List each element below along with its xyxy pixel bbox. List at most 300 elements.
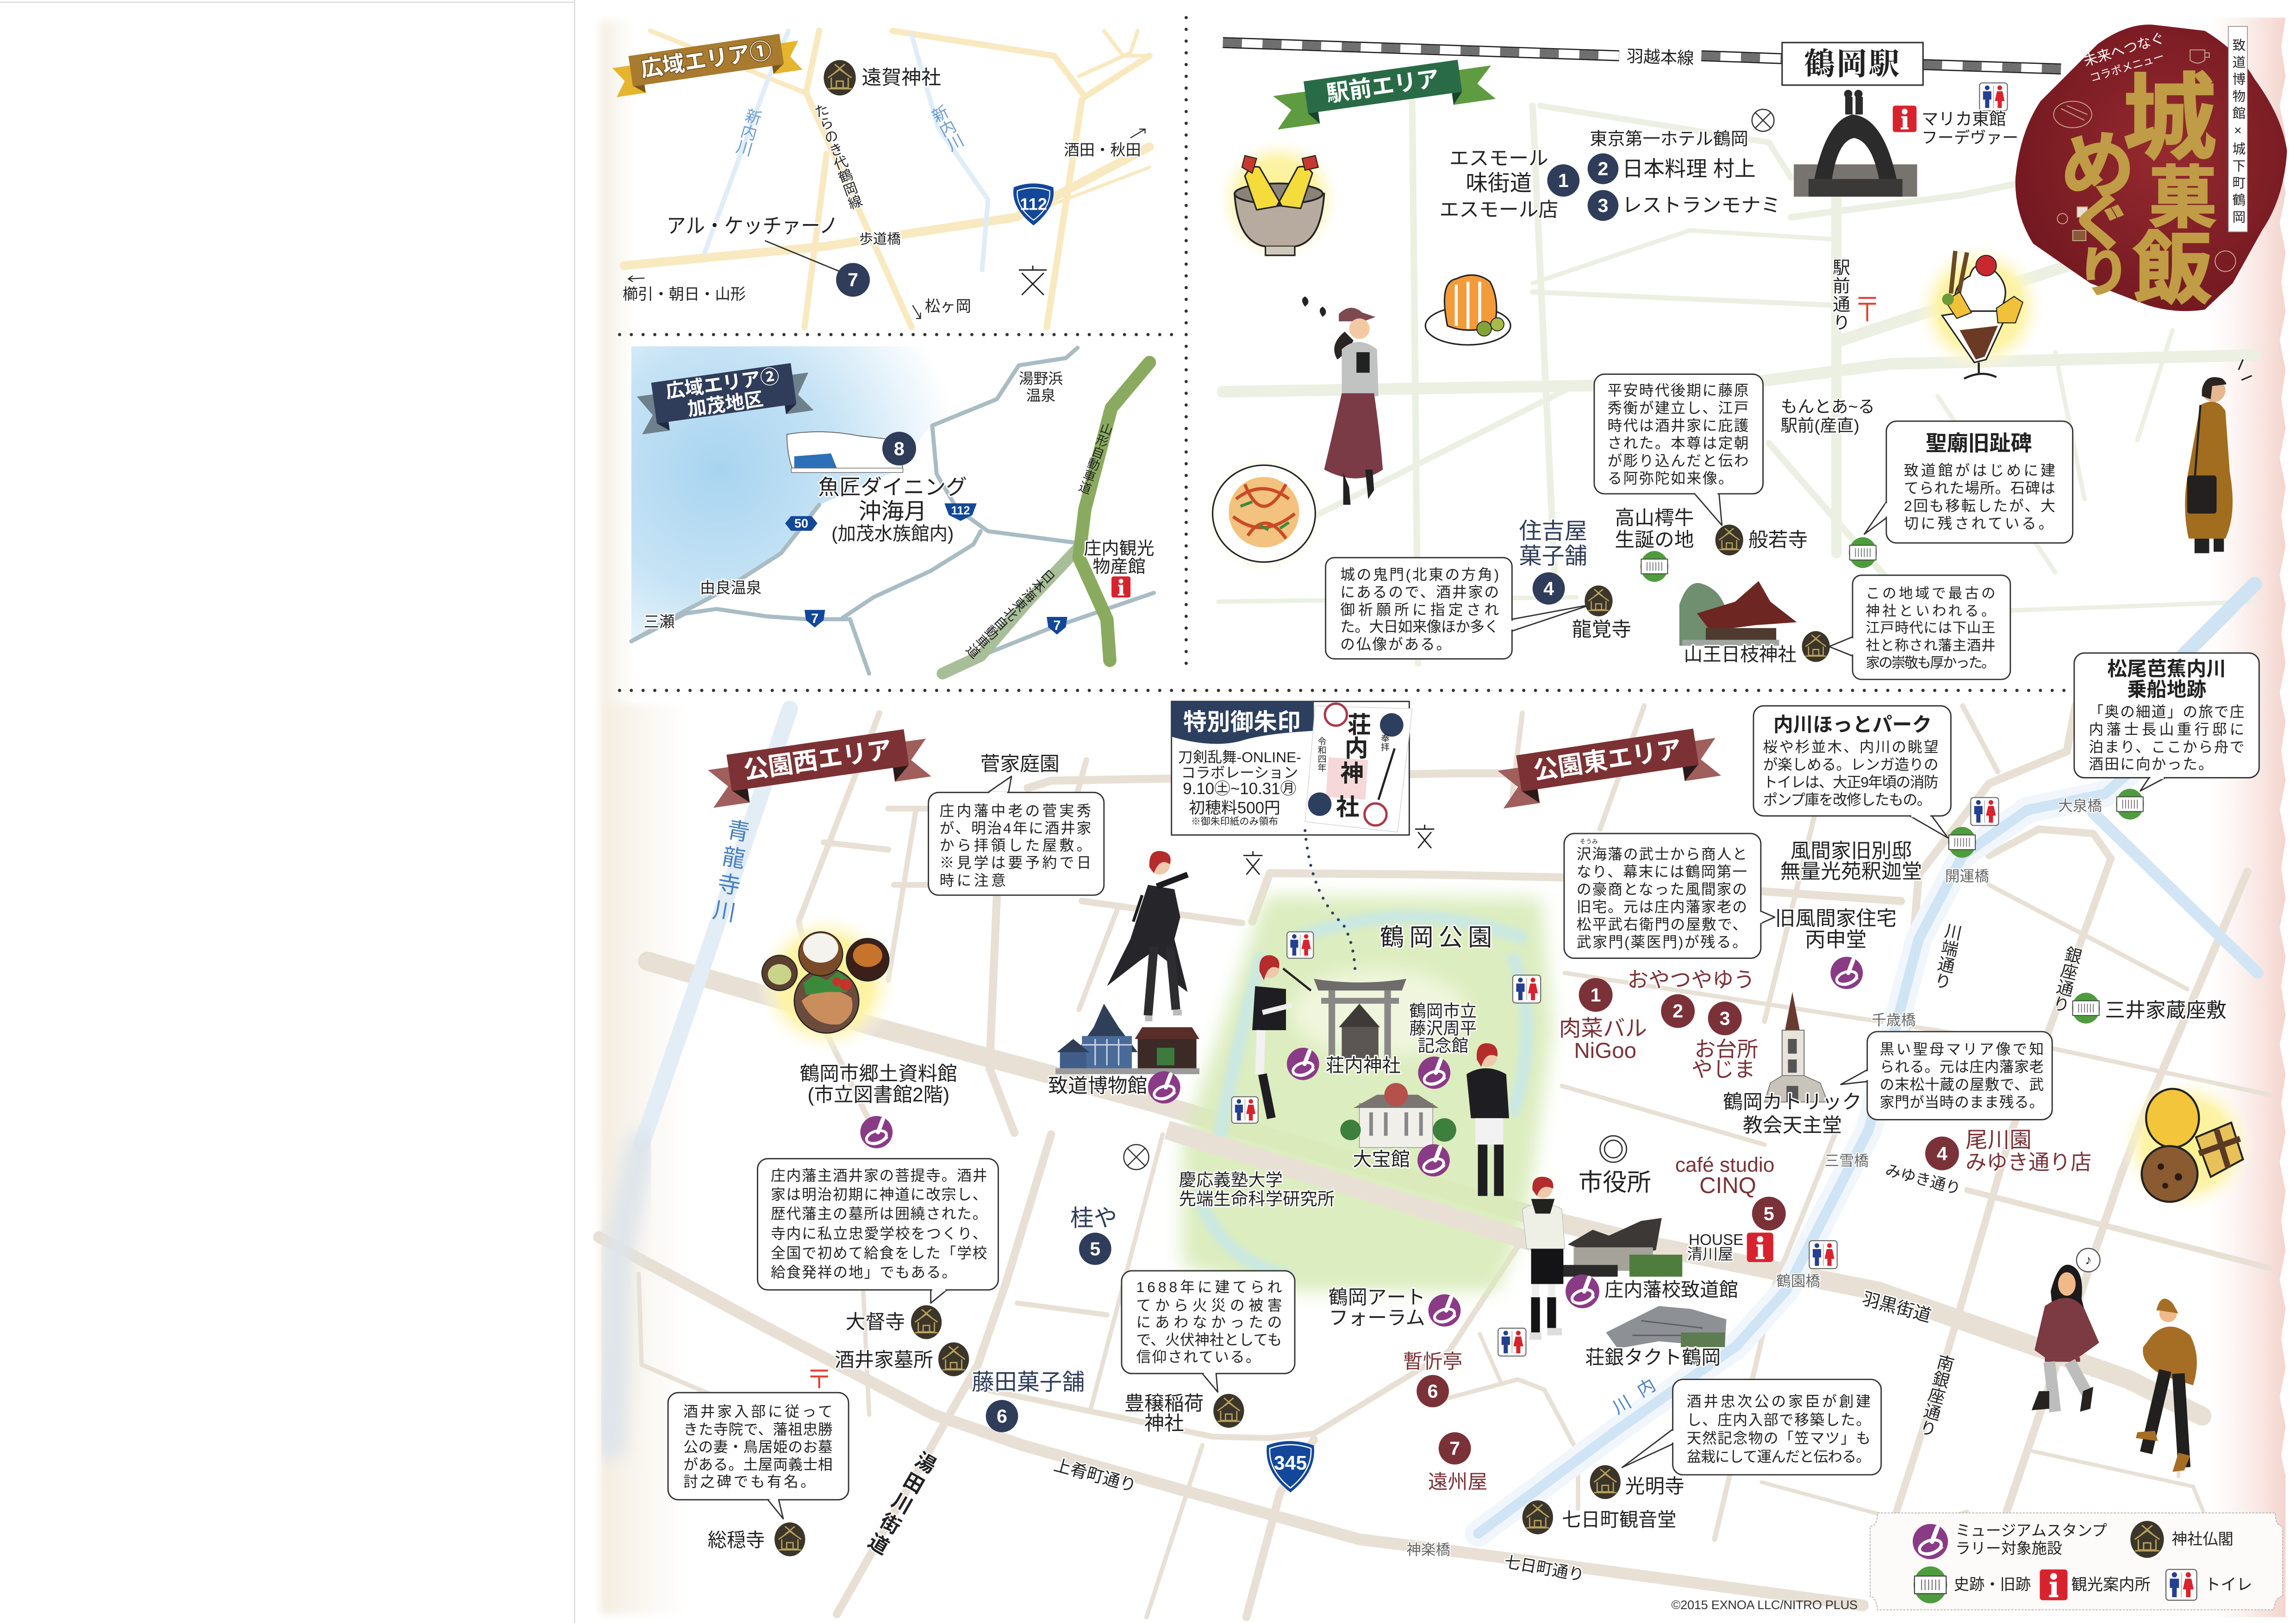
label: cafe studio: café studio — [1675, 1154, 1774, 1176]
ribbon: park east — [1496, 726, 1721, 808]
label: Shonai shrine: 荘内神社 — [1326, 1055, 1401, 1076]
callout: Catholic church: られる。元は庄内藩家老 — [1880, 1058, 2046, 1075]
callout: Suga garden: から拝領した屋敷。 — [940, 837, 1094, 853]
label: Miyuki road: みゆき通り — [1884, 1162, 1962, 1198]
panel: park east area — [1496, 653, 2283, 1612]
legend icon: toilet — [2166, 1569, 2197, 1600]
icon: stamp Shonai shrine — [1287, 1048, 1319, 1080]
shield 112: 112 — [1020, 194, 1047, 213]
callout: Ryukakuji: の仏像がある。 — [1340, 636, 1452, 653]
label: Oga shrine: 遠賀神社 — [862, 67, 941, 89]
label: NiGoo: NiGoo — [1574, 1038, 1636, 1063]
label: product hall: 物産館 — [1092, 557, 1146, 577]
legend — [1870, 1513, 2283, 1610]
callout: Basho: 「奥の細道」の旅で庄 — [2089, 703, 2246, 720]
label: Chidokan: 庄内藩校致道館 — [1604, 1279, 1738, 1300]
person: man with cap — [2136, 1299, 2197, 1472]
label: Marika east: マリカ東館 — [1922, 109, 2006, 128]
goshuin sheet — [1305, 703, 1412, 832]
label: Heishindo: 丙申堂 — [1805, 928, 1866, 951]
title characters: ぐ — [2070, 188, 2131, 257]
callout: Catholic church: の末松十蔵の屋敷で、武 — [1880, 1076, 2046, 1093]
icon: Takayama scroll — [1641, 551, 1668, 582]
label: Komyoji: 光明寺 — [1625, 1475, 1685, 1498]
callout: Seibyo — [1864, 421, 2073, 543]
label: Okikurage: 沖海月 — [859, 499, 927, 524]
label: Ekimae-dori: 駅前通り — [1829, 258, 1850, 332]
label: Nanukamachi road: 七日町通り — [1503, 1553, 1585, 1585]
ribbon: Kamo: 広域エリア② — [664, 365, 780, 402]
number 1 east: 1 — [1591, 984, 1601, 1006]
ribbon: Kamo — [635, 361, 814, 435]
small food line art — [2053, 50, 2236, 272]
building: church — [1765, 992, 1828, 1102]
callout: Seibyo: てられた場所。石碑は — [1904, 480, 2058, 497]
callout: Kazama house: 沢海藩の武士から商人と — [1577, 846, 1748, 862]
icon: shrine Oga — [824, 60, 856, 95]
river Uchikawa — [1478, 734, 2258, 1534]
callout: Sotonji — [668, 1393, 849, 1519]
label: Al Che-cciano: アル・ケッチァーノ — [667, 215, 838, 237]
number 6 west — [986, 1400, 1018, 1432]
callout: Basho: 乗船地跡 — [2127, 678, 2206, 701]
icon: info — [1111, 577, 1130, 597]
icon: Kannon hall — [1522, 1500, 1553, 1534]
number 6 west: 6 — [997, 1405, 1007, 1427]
vertical strip: 致道博物館×城下町鶴岡 — [2230, 38, 2246, 227]
callout: Uchikawa hot park: 内川ほっとパーク — [1773, 714, 1932, 736]
label: Kiyokawaya: 清川屋 — [1687, 1246, 1733, 1263]
label: Monami: レストランモナミ — [1622, 194, 1781, 217]
illustration: napolitan — [1205, 455, 1323, 572]
ribbon: Kamo: 加茂地区 — [686, 388, 765, 420]
number 7 — [836, 263, 870, 297]
callout: Ryukakuji: にあるので、酒井家の — [1340, 584, 1500, 600]
illustration: tendon bowl — [1217, 138, 1340, 261]
label: Murakami: 日本料理 村上 — [1622, 157, 1756, 181]
roads wide area 1 — [624, 31, 1149, 327]
callout: Kazama house: なり、幕末には鶴岡第一 — [1577, 864, 1748, 880]
callout: Hannyaji: 平安時代後期に藤原 — [1607, 382, 1750, 398]
panel: station area — [1205, 43, 2255, 679]
shield 345 — [1267, 1441, 1314, 1492]
catch copy: 未来へつなぐ — [2082, 31, 2166, 69]
callout: Seibyo: 聖廟旧趾碑 — [1926, 431, 2032, 455]
icon: toilet park b — [1232, 1097, 1258, 1123]
callout: Daitokuji: 寺内に私立忠愛学校をつくり、 — [771, 1225, 988, 1242]
number 1 — [1547, 164, 1579, 197]
legend text: stamp rally: ラリー対象施設 — [1955, 1540, 2062, 1557]
number 4 east: 4 — [1937, 1143, 1947, 1164]
callout: Komyoji: 酒井忠次公の家臣が創建 — [1687, 1393, 1872, 1410]
label: Haguro road: 羽黒街道 — [1860, 1289, 1933, 1326]
school mark b — [1243, 851, 1262, 875]
number 6 east — [1416, 1375, 1449, 1407]
callout: Hojo Inari: 1688年に建てられ — [1136, 1279, 1283, 1295]
icon: toilet park a — [1287, 932, 1313, 958]
label: Fujisawa museum 3: 記念館 — [1418, 1036, 1468, 1055]
icon: Sotonji — [774, 1523, 805, 1556]
ribbon: wide area 1: 広域エリア① — [639, 38, 774, 82]
number 4 east — [1925, 1137, 1959, 1170]
callout: Kazama house: 旧宅。元は庄内藩家老の — [1577, 899, 1748, 915]
label: Uetsu line: 羽越本線 — [1626, 47, 1694, 68]
callout: Daitokuji — [758, 1159, 998, 1303]
label: Uchikawa river 1: 内 — [1634, 1375, 1659, 1401]
number 5 east: 5 — [1764, 1203, 1774, 1224]
title characters: 城 — [2122, 66, 2216, 171]
callout: Komyoji: 盆栽にして運んだと伝わる。 — [1687, 1448, 1872, 1465]
number 8: 8 — [894, 438, 905, 459]
callout: Hannyaji: が彫り込んだと伝わ — [1607, 453, 1750, 469]
police mark — [1752, 109, 1774, 131]
ribbon: park east: 公園東エリア — [1531, 735, 1684, 785]
route 50: 50 — [794, 516, 808, 530]
dotted route to shrine — [1305, 831, 1355, 969]
person: woman with camera: ♪ — [2085, 1253, 2091, 1268]
label: Keio: 慶応義塾大学 — [1179, 1170, 1283, 1189]
title badge — [2015, 25, 2287, 314]
callout: Sotonji: 討之碑でも有名。 — [683, 1473, 817, 1490]
callout: Kazama house: そうみ — [1579, 838, 1598, 845]
label: Catholic: 鶴岡カトリック — [1723, 1091, 1862, 1113]
illustration: woman with hat — [1302, 297, 1383, 505]
label: Kazama villa: 風間家旧別邸 — [1791, 840, 1912, 863]
label: Old Kazama residence: 旧風間家住宅 — [1775, 907, 1897, 930]
number 7 east — [1439, 1432, 1471, 1465]
label: footbridge: 歩道橋 — [859, 231, 901, 247]
icon: stamp art forum — [1429, 1294, 1460, 1326]
route 7 a — [805, 610, 825, 628]
icon: stamp Fujisawa — [1418, 1057, 1450, 1089]
title characters: 飯 — [2133, 226, 2212, 314]
blank left sheet — [0, 0, 574, 1623]
icon: toilet station — [1979, 83, 2008, 111]
post mark — [1859, 298, 1876, 321]
label: Kaiun bridge: 開運橋 — [1945, 868, 1989, 884]
label: Sakata Akita: 酒田・秋田 — [1064, 142, 1141, 159]
number 7 east: 7 — [1449, 1438, 1460, 1459]
label: Montoa: もんとあ~る — [1781, 397, 1875, 416]
label: Kakuen bridge: 鶴園橋 — [1776, 1273, 1820, 1289]
route 7 b — [1047, 617, 1067, 634]
ribbon: park west: 公園西エリア — [742, 736, 894, 784]
building: Chidokan — [1559, 1218, 1682, 1277]
post mark west — [811, 1371, 828, 1388]
label: Taihokan: 大宝館 — [1353, 1149, 1410, 1170]
route 112 small: 112 — [951, 504, 970, 517]
label: Muryokoen: 無量光苑釈迦堂 — [1780, 860, 1922, 883]
label: confectionery: 菓子舗 — [1519, 544, 1587, 569]
label: city hall mark — [1600, 1136, 1627, 1162]
arrow — [1130, 129, 1145, 138]
label: Hannyaji: 般若寺 — [1748, 529, 1808, 551]
legend text: toilet: トイレ — [2205, 1576, 2252, 1594]
callout: Basho: 松尾芭蕉内川 — [2107, 658, 2226, 680]
label: Keio institute: 先端生命科学研究所 — [1179, 1189, 1335, 1209]
callout: Hie shrine — [1829, 575, 2010, 679]
icon: toilet hot park — [1971, 797, 1999, 826]
label: Tsuruoka park: 鶴岡公園 — [1380, 924, 1497, 951]
legend text: shrine: 神社仏閣 — [2172, 1531, 2234, 1548]
roads — [631, 348, 1154, 673]
sea — [631, 346, 1078, 641]
label: Takuto hall: 荘銀タクト鶴岡 — [1585, 1347, 1721, 1368]
building: Takuto hall — [1606, 1306, 1726, 1349]
label: local archive: 鶴岡市郷土資料館 — [800, 1063, 957, 1085]
callout: Hojo Inari — [1122, 1271, 1295, 1392]
label: Daitokuji: 大督寺 — [846, 1311, 905, 1333]
number 4: 4 — [1543, 578, 1554, 599]
icon: info station — [1893, 106, 1916, 132]
icon: hot park scroll — [1948, 827, 1976, 858]
leader — [765, 241, 840, 272]
label: Enshuya: 遠州屋 — [1428, 1471, 1487, 1493]
callout: Daitokuji: 給食発祥の地」でもある。 — [771, 1264, 957, 1281]
building: Taihokan — [1340, 1083, 1456, 1148]
callout: Suga garden: が、明治4年に酒井家 — [940, 820, 1094, 836]
number 8 — [882, 432, 916, 466]
label: Zanshintei: 暫忻亭 — [1403, 1351, 1462, 1373]
label: Uchikawa river 2: 川 — [1610, 1393, 1635, 1418]
callout: Sotonji: 公の妻・鳥居姫のお墓 — [683, 1438, 835, 1455]
illustration: cookies — [2120, 1077, 2255, 1212]
icon: Sakai graves — [938, 1343, 969, 1376]
divider dots — [619, 18, 2258, 690]
label: Chitose bridge: 千歳橋 — [1872, 1012, 1915, 1028]
callout: Hie shrine: 神社といわれる。 — [1866, 603, 1996, 619]
legend text: stamp rally: ミュージアムスタンプ — [1955, 1522, 2107, 1539]
callout: Ryukakuji — [1326, 558, 1591, 659]
callout: Hannyaji: る阿弥陀如来像。 — [1607, 470, 1734, 487]
goshuin sheet: 荘 — [1348, 712, 1371, 738]
title characters — [2061, 66, 2216, 314]
label: shrine: 神社 — [1144, 1412, 1184, 1435]
callout: Hannyaji: 秀衡が建立し、江戸 — [1607, 400, 1750, 417]
railway — [1223, 43, 2061, 69]
number 1: 1 — [1558, 170, 1569, 191]
callout: Hie shrine: 江戸時代には下山王 — [1866, 620, 1996, 636]
station roads — [1218, 101, 2255, 663]
callout: Daitokuji: 庄内藩主酒井家の菩提寺。酒井 — [771, 1167, 988, 1184]
river name right: 新内川 — [927, 103, 966, 154]
callout: Catholic church — [1841, 1032, 2052, 1119]
illustration: set meal — [756, 913, 897, 1054]
label: Ginza road: 銀座通り — [2049, 944, 2084, 1014]
icon: stamp Chidokan — [1566, 1275, 1599, 1308]
callout: Ryukakuji: 城の鬼門(北東の方角) — [1340, 566, 1500, 583]
Nihonkai expressway — [942, 549, 1078, 673]
label: S-mall: エスモール — [1449, 147, 1548, 169]
label: Miyuki branch: みゆき通り店 — [1965, 1150, 2091, 1174]
label: Yutagawa road: 湯田川街道 — [861, 1447, 940, 1561]
panel: wide area 2 Kamo — [631, 346, 1154, 673]
label: Fujisawa museum 2: 藤沢周平 — [1409, 1019, 1477, 1038]
label: Oizumi bridge: 大泉橋 — [2058, 797, 2102, 814]
callout: Sotonji: きた寺院で、藩祖忠勝 — [683, 1421, 835, 1437]
label: Seiryuji river: 青龍寺川 — [707, 817, 751, 928]
illustration: parfait — [1915, 243, 2045, 379]
legend icon: info — [2040, 1569, 2067, 1600]
callout: Uchikawa hot park: が楽しめる。レンガ造りの — [1763, 756, 1939, 773]
ribbon: station area: 駅前エリア — [1325, 66, 1441, 107]
icon: Ryukakuji — [1585, 585, 1613, 616]
icon: stamp library — [861, 1116, 892, 1148]
callout: Hie shrine: この地域で最古の — [1866, 585, 1996, 601]
legend text: historic: 史跡・旧跡 — [1954, 1576, 2031, 1593]
callout: Basho: 内藩士長山重行邸に — [2089, 721, 2246, 738]
callout: Suga garden — [929, 776, 1104, 895]
label: Matsugaoka: 松ヶ岡 — [925, 298, 971, 315]
label: Ajikaido: 味街道 — [1466, 171, 1532, 196]
callout: Daitokuji: 歴代藩主の墓所は囲繞された。 — [771, 1205, 988, 1222]
callout: Suga garden: 時に注意 — [940, 872, 1008, 889]
label: Sanze: 三瀬 — [644, 614, 674, 631]
river name left: 新内川 — [733, 106, 763, 158]
ribbon: park west — [706, 726, 931, 808]
label: Yunohama: 湯野浜 — [1019, 370, 1063, 387]
label: library: (市立図書館2階) — [807, 1084, 949, 1106]
police mark — [1124, 1144, 1149, 1169]
label: Shonai tourism: 庄内観光 — [1084, 539, 1154, 559]
title characters: 菓 — [2149, 161, 2216, 236]
panel: park west area — [668, 702, 1509, 1561]
number 2 east: 2 — [1672, 1001, 1683, 1022]
legend icon: stamp — [1913, 1524, 1948, 1559]
goshuin sheet: 内 — [1345, 735, 1368, 762]
number 3 east: 3 — [1720, 1008, 1730, 1029]
title characters: め — [2061, 124, 2134, 207]
shield 112 — [1014, 184, 1053, 224]
goshuin text: 9.10㊏~10.31㊊ — [1183, 780, 1296, 798]
callout: Uchikawa hot park: ポンプ庫を改修したもの。 — [1763, 791, 1932, 808]
callout: Hannyaji: 時代は酒井家に庇護 — [1607, 417, 1750, 434]
callout: Kazama house — [1564, 833, 1775, 958]
goshuin sheet: 神 — [1340, 760, 1364, 787]
paper tint right — [2209, 18, 2296, 1617]
icon: Basho scroll — [2116, 789, 2144, 820]
Yamagata expressway — [1079, 362, 1149, 660]
goshuin text: 初穂料500円 — [1189, 799, 1280, 817]
label: Fujisawa museum 1: 鶴岡市立 — [1409, 1001, 1477, 1020]
callout: Suga garden: ※見学は要予約で日 — [940, 854, 1094, 871]
character: red hair black jacket — [1466, 1043, 1509, 1196]
number 4 — [1533, 572, 1565, 604]
callout: Kazama house: 武家門(薬医門)が残る。 — [1577, 934, 1748, 951]
callout: Basho — [2074, 653, 2259, 791]
callout: Hie shrine: 家の崇敬も厚かった。 — [1866, 655, 1996, 671]
shield 345: 345 — [1274, 1452, 1307, 1474]
legend icon: shrine — [2130, 1521, 2164, 1558]
callout: Komyoji: 天然記念物の「笠マツ」も — [1687, 1430, 1872, 1446]
callout: Hojo Inari: てから火災の被害 — [1136, 1297, 1283, 1314]
callout: Ryukakuji: た。大日如来像ほか多く — [1340, 618, 1500, 635]
number 7: 7 — [848, 269, 858, 291]
callout: Sotonji: がある。土屋両義士相 — [683, 1456, 835, 1473]
icon: toilet Kiyokawaya — [1809, 1241, 1837, 1269]
callout: Ryukakuji: 御祈願所に指定され — [1340, 602, 1500, 618]
icon: Mitsui scroll — [2072, 993, 2100, 1024]
callout: Seibyo: 2回も移転したが、大 — [1904, 497, 2058, 514]
callout: Basho: 酒田に向かった。 — [2089, 756, 2214, 772]
label: art forum 2: フォーラム — [1329, 1307, 1425, 1329]
callout: Basho: 泊まり、ここから舟で — [2089, 739, 2246, 755]
number 2 east — [1661, 994, 1695, 1028]
expressway name: 山形自動車道 — [1075, 420, 1114, 495]
road network: park map — [599, 706, 2270, 1617]
number 3: 3 — [1598, 195, 1608, 216]
number 2: 2 — [1598, 158, 1608, 180]
label: onsen: 温泉 — [1026, 387, 1055, 404]
callout: Kazama house: の豪商となった風間家の — [1577, 881, 1748, 898]
title characters: り — [2077, 243, 2130, 302]
catch copy 2: コラボメニュー — [2088, 50, 2165, 85]
illustration: woman looking up — [2185, 360, 2252, 553]
route 7 a: 7 — [811, 611, 818, 626]
station box: 鶴岡駅 — [1804, 48, 1901, 81]
goshuin sheet: 令和四年 — [1316, 737, 1326, 772]
label: Tokyo Daiichi Hotel: 東京第一ホテル鶴岡 — [1590, 130, 1748, 149]
callout: Hannyaji — [1594, 374, 1763, 525]
school mark a — [1415, 825, 1434, 848]
river Seiryuji — [611, 709, 790, 1445]
label: in aquarium: (加茂水族館内) — [831, 523, 954, 544]
label: Oyatsuya Yu: おやつやゆう — [1627, 968, 1755, 992]
arrow south — [912, 305, 921, 318]
callout: Uchikawa hot park — [1753, 706, 1951, 838]
illustration: torii and shrine — [1314, 979, 1406, 1064]
number 5 east — [1752, 1197, 1786, 1231]
panel: special goshuin — [1172, 702, 1412, 835]
park green — [1167, 895, 1553, 1291]
goshuin text: 刀剣乱舞-ONLINE- — [1178, 749, 1301, 765]
station box — [1782, 43, 1923, 85]
number 3 east — [1708, 1001, 1742, 1035]
number 1 east — [1579, 978, 1613, 1012]
route 7 b: 7 — [1053, 618, 1061, 633]
goshuin text — [1178, 749, 1301, 827]
label: Tenshudo: 教会天主堂 — [1743, 1114, 1842, 1137]
ribbon: station area — [1272, 55, 1496, 130]
callout: Hannyaji: された。本尊は定朝 — [1607, 435, 1750, 452]
number 5 west — [1079, 1233, 1111, 1265]
road name: たらのき代鶴岡線 — [811, 101, 864, 212]
label: Yura onsen: 由良温泉 — [700, 579, 761, 597]
legend icon: scroll — [1914, 1567, 1947, 1604]
label: Odaidokoro: お台所 — [1694, 1037, 1758, 1061]
label: Suga garden: 菅家庭園 — [980, 753, 1060, 775]
icon: stamp Chido museum — [1148, 1071, 1180, 1104]
rivers — [705, 31, 988, 270]
character: white jacket — [1522, 1177, 1565, 1340]
number 6 east: 6 — [1428, 1380, 1438, 1402]
aquarium building — [787, 432, 903, 473]
building: Chido museum — [1055, 1004, 1199, 1074]
label: S-mall store: エスモール店 — [1439, 199, 1558, 221]
label: CINQ: CINQ — [1699, 1173, 1756, 1198]
icon: info Kiyokawaya — [1747, 1233, 1773, 1262]
river upper right — [2176, 584, 2255, 663]
label: HOUSE: HOUSE — [1689, 1231, 1743, 1249]
goshuin title: 特別御朱印 — [1183, 709, 1301, 735]
callout: Hojo Inari: で、火伏神社としても — [1136, 1331, 1283, 1348]
icon: stamp Taihokan — [1417, 1144, 1450, 1176]
label: art forum 1: 鶴岡アート — [1329, 1287, 1425, 1308]
label: Kushibiki: 櫛引・朝日・山形 — [623, 286, 746, 303]
person: woman with camera — [2032, 1248, 2100, 1412]
callout: Uchikawa hot park: 桜や杉並木、内川の眺望 — [1763, 739, 1939, 755]
callout: Seibyo: 切に残されている。 — [1904, 515, 2055, 532]
